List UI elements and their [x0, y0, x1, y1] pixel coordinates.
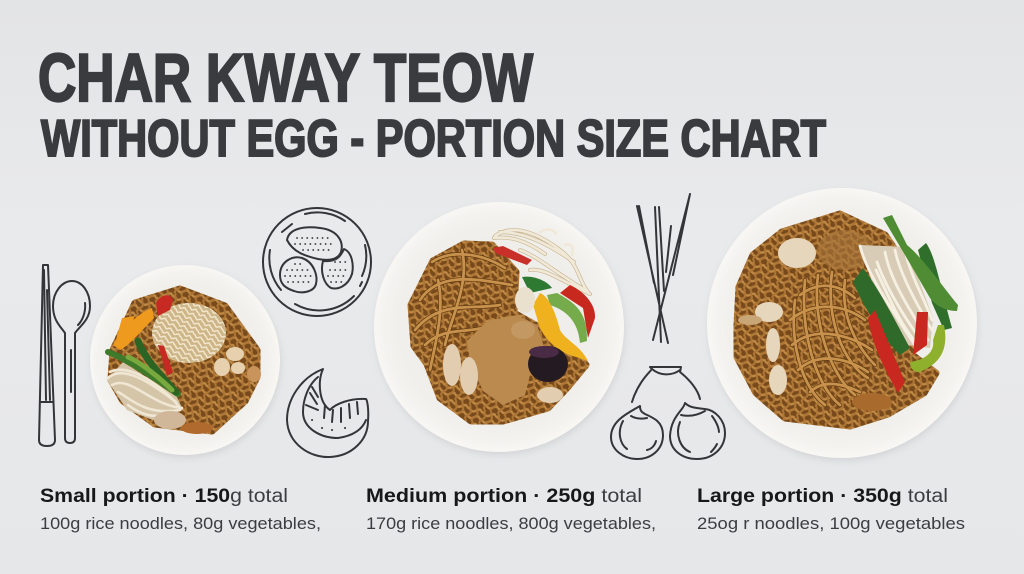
plate shadow [709, 192, 977, 460]
yellow pepper [533, 293, 588, 361]
chicken pieces [154, 347, 261, 434]
red pepper [156, 295, 173, 376]
medium heading: Medium portion · 250g total [366, 486, 642, 507]
plate: large portion [707, 188, 977, 460]
white noodles [860, 245, 933, 348]
left onion [611, 406, 663, 459]
title [38, 40, 826, 168]
white noodles [107, 362, 183, 420]
green vegetables [108, 341, 178, 394]
chopsticks [637, 194, 690, 343]
noodles [737, 214, 936, 426]
small details: 100g rice noodles, 80g vegetables, [40, 515, 321, 533]
icon: crescent dumpling [287, 369, 368, 457]
chicken and mushroom pieces [443, 287, 563, 403]
plate shadow [92, 269, 280, 457]
red pepper right [560, 285, 595, 338]
caption: small portion [40, 486, 321, 533]
plate: medium portion [374, 202, 624, 454]
large details: 25og r noodles, 100g vegetables [697, 515, 965, 533]
plate [374, 202, 624, 452]
red pepper [868, 310, 928, 393]
icon: plate of dumplings [263, 208, 371, 316]
orange pepper [113, 308, 154, 350]
central long noodles [790, 272, 875, 405]
aubergine [528, 346, 568, 382]
plate: small portion [90, 265, 280, 457]
medium details: 170g rice noodles, 800g vegetables, [366, 515, 656, 533]
noodles [111, 289, 257, 431]
green sliver [522, 277, 552, 293]
long noodle strands [415, 250, 512, 370]
icon: chopsticks and onions [611, 194, 725, 459]
icon: chopsticks and spoon [39, 265, 90, 446]
flat rice noodles [467, 315, 545, 405]
plate [90, 265, 280, 455]
large heading: Large portion · 350g total [697, 486, 948, 507]
caption: medium portion [366, 486, 656, 533]
small heading: Small portion · 150 g total [40, 486, 288, 507]
red pepper top [493, 246, 532, 265]
white noodles [494, 229, 590, 294]
title line 1: CHAR KWAY TEOW [38, 40, 534, 116]
green pepper [547, 293, 587, 343]
mushroom and chicken pieces [738, 238, 892, 411]
title line 2: WITHOUT EGG - PORTION SIZE CHART [41, 110, 826, 168]
onion stem arc [632, 367, 700, 402]
caption: large portion [697, 486, 965, 533]
plate shadow [376, 206, 624, 454]
sauce-soaked upper area [817, 230, 873, 270]
plate [707, 188, 977, 458]
noodles [411, 244, 586, 421]
green vegetables [853, 215, 958, 372]
right onion [670, 403, 725, 459]
pale noodle nest [152, 303, 226, 363]
